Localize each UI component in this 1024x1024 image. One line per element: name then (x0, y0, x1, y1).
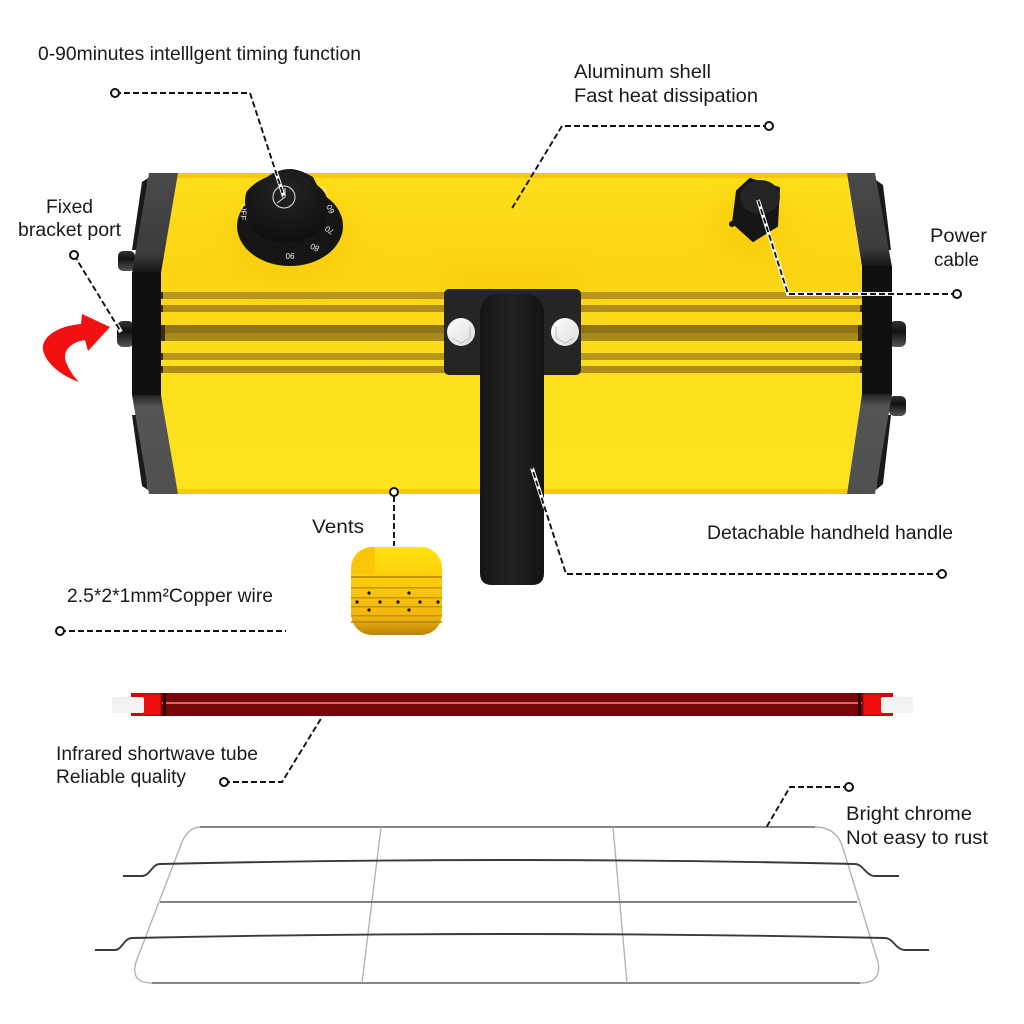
power cable gland (729, 179, 780, 241)
tube highlight (162, 702, 862, 704)
callout: infrared tube (56, 717, 322, 788)
chrome grille (95, 827, 929, 983)
tube white ends (112, 697, 913, 713)
dial numbers: 50 (318, 185, 329, 196)
handle (480, 294, 544, 585)
chrome leader (766, 783, 853, 828)
left end cap (132, 173, 178, 494)
power label: Power (930, 226, 988, 247)
callout: timing function (38, 44, 361, 197)
chrome label: Bright chrome (846, 804, 972, 825)
dial numbers: 90 (285, 251, 294, 260)
shell top and bottom edges (177, 173, 848, 494)
chrome label line 2: Not easy to rust (846, 828, 989, 849)
shell leader (511, 122, 773, 210)
dial numbers: 80 (309, 241, 321, 253)
heater body (117, 169, 906, 585)
dial numbers: 70 (323, 223, 336, 236)
power leader (758, 200, 961, 298)
vent holes (355, 591, 440, 612)
callout: power cable (758, 200, 988, 298)
bracket label: Fixed (46, 197, 93, 218)
infrared tube (112, 693, 913, 716)
fin end notches (161, 292, 862, 373)
dial numbers: 60 (325, 203, 337, 215)
side pegs (117, 251, 906, 416)
grille top and bottom rails (152, 827, 860, 983)
grille cross wires (362, 827, 627, 983)
timing label: 0-90minutes intelllgent timing function (38, 44, 361, 65)
bracket label line 2: bracket port (18, 220, 122, 241)
bracket leader (70, 251, 121, 332)
rear mounting lugs (132, 178, 891, 490)
vents leader (390, 488, 398, 546)
handle leader (532, 468, 946, 578)
callout: aluminum shell (511, 62, 773, 210)
dial base (237, 186, 343, 266)
handle mounting plate (444, 289, 581, 375)
vents detail (351, 547, 442, 635)
tube label: Infrared shortwave tube (56, 744, 258, 765)
aluminum shell (161, 173, 862, 494)
timing leader (111, 89, 284, 197)
dial knob (245, 169, 327, 243)
clock icon (273, 186, 295, 208)
callout: handle (532, 468, 953, 578)
tube collars (163, 693, 861, 716)
heat fins (161, 292, 862, 373)
copper leader (56, 627, 286, 635)
tube red holders (131, 693, 893, 716)
copper label: 2.5*2*1mm²Copper wire (67, 586, 273, 607)
power label line 2: cable (934, 250, 979, 271)
callout: copper wire (56, 586, 286, 635)
shell label line 2: Fast heat dissipation (574, 86, 758, 107)
tube glass (161, 693, 863, 716)
vent ribs (351, 576, 442, 623)
vent upper left shade (351, 547, 375, 574)
tube label line 2: Reliable quality (56, 767, 186, 788)
right end cap (847, 173, 892, 494)
callout: chrome (766, 783, 989, 849)
vent swatch (351, 547, 442, 635)
vents label: Vents (312, 517, 364, 538)
grille frame (135, 827, 879, 983)
mounting bolts (447, 318, 579, 346)
red arrow (43, 314, 110, 382)
dial numbers: OFF (238, 204, 249, 221)
shell label: Aluminum shell (574, 62, 711, 83)
handle label: Detachable handheld handle (707, 523, 953, 544)
tube leader (220, 717, 322, 786)
callout: vents (312, 488, 398, 546)
grille middle bar (160, 901, 857, 903)
soft shadows on shell (230, 195, 785, 297)
dial numbers (238, 185, 337, 260)
grille upper bar (123, 860, 899, 876)
timer dial (237, 169, 343, 266)
callout: bracket port (18, 197, 122, 332)
grille lower bar (95, 934, 929, 950)
